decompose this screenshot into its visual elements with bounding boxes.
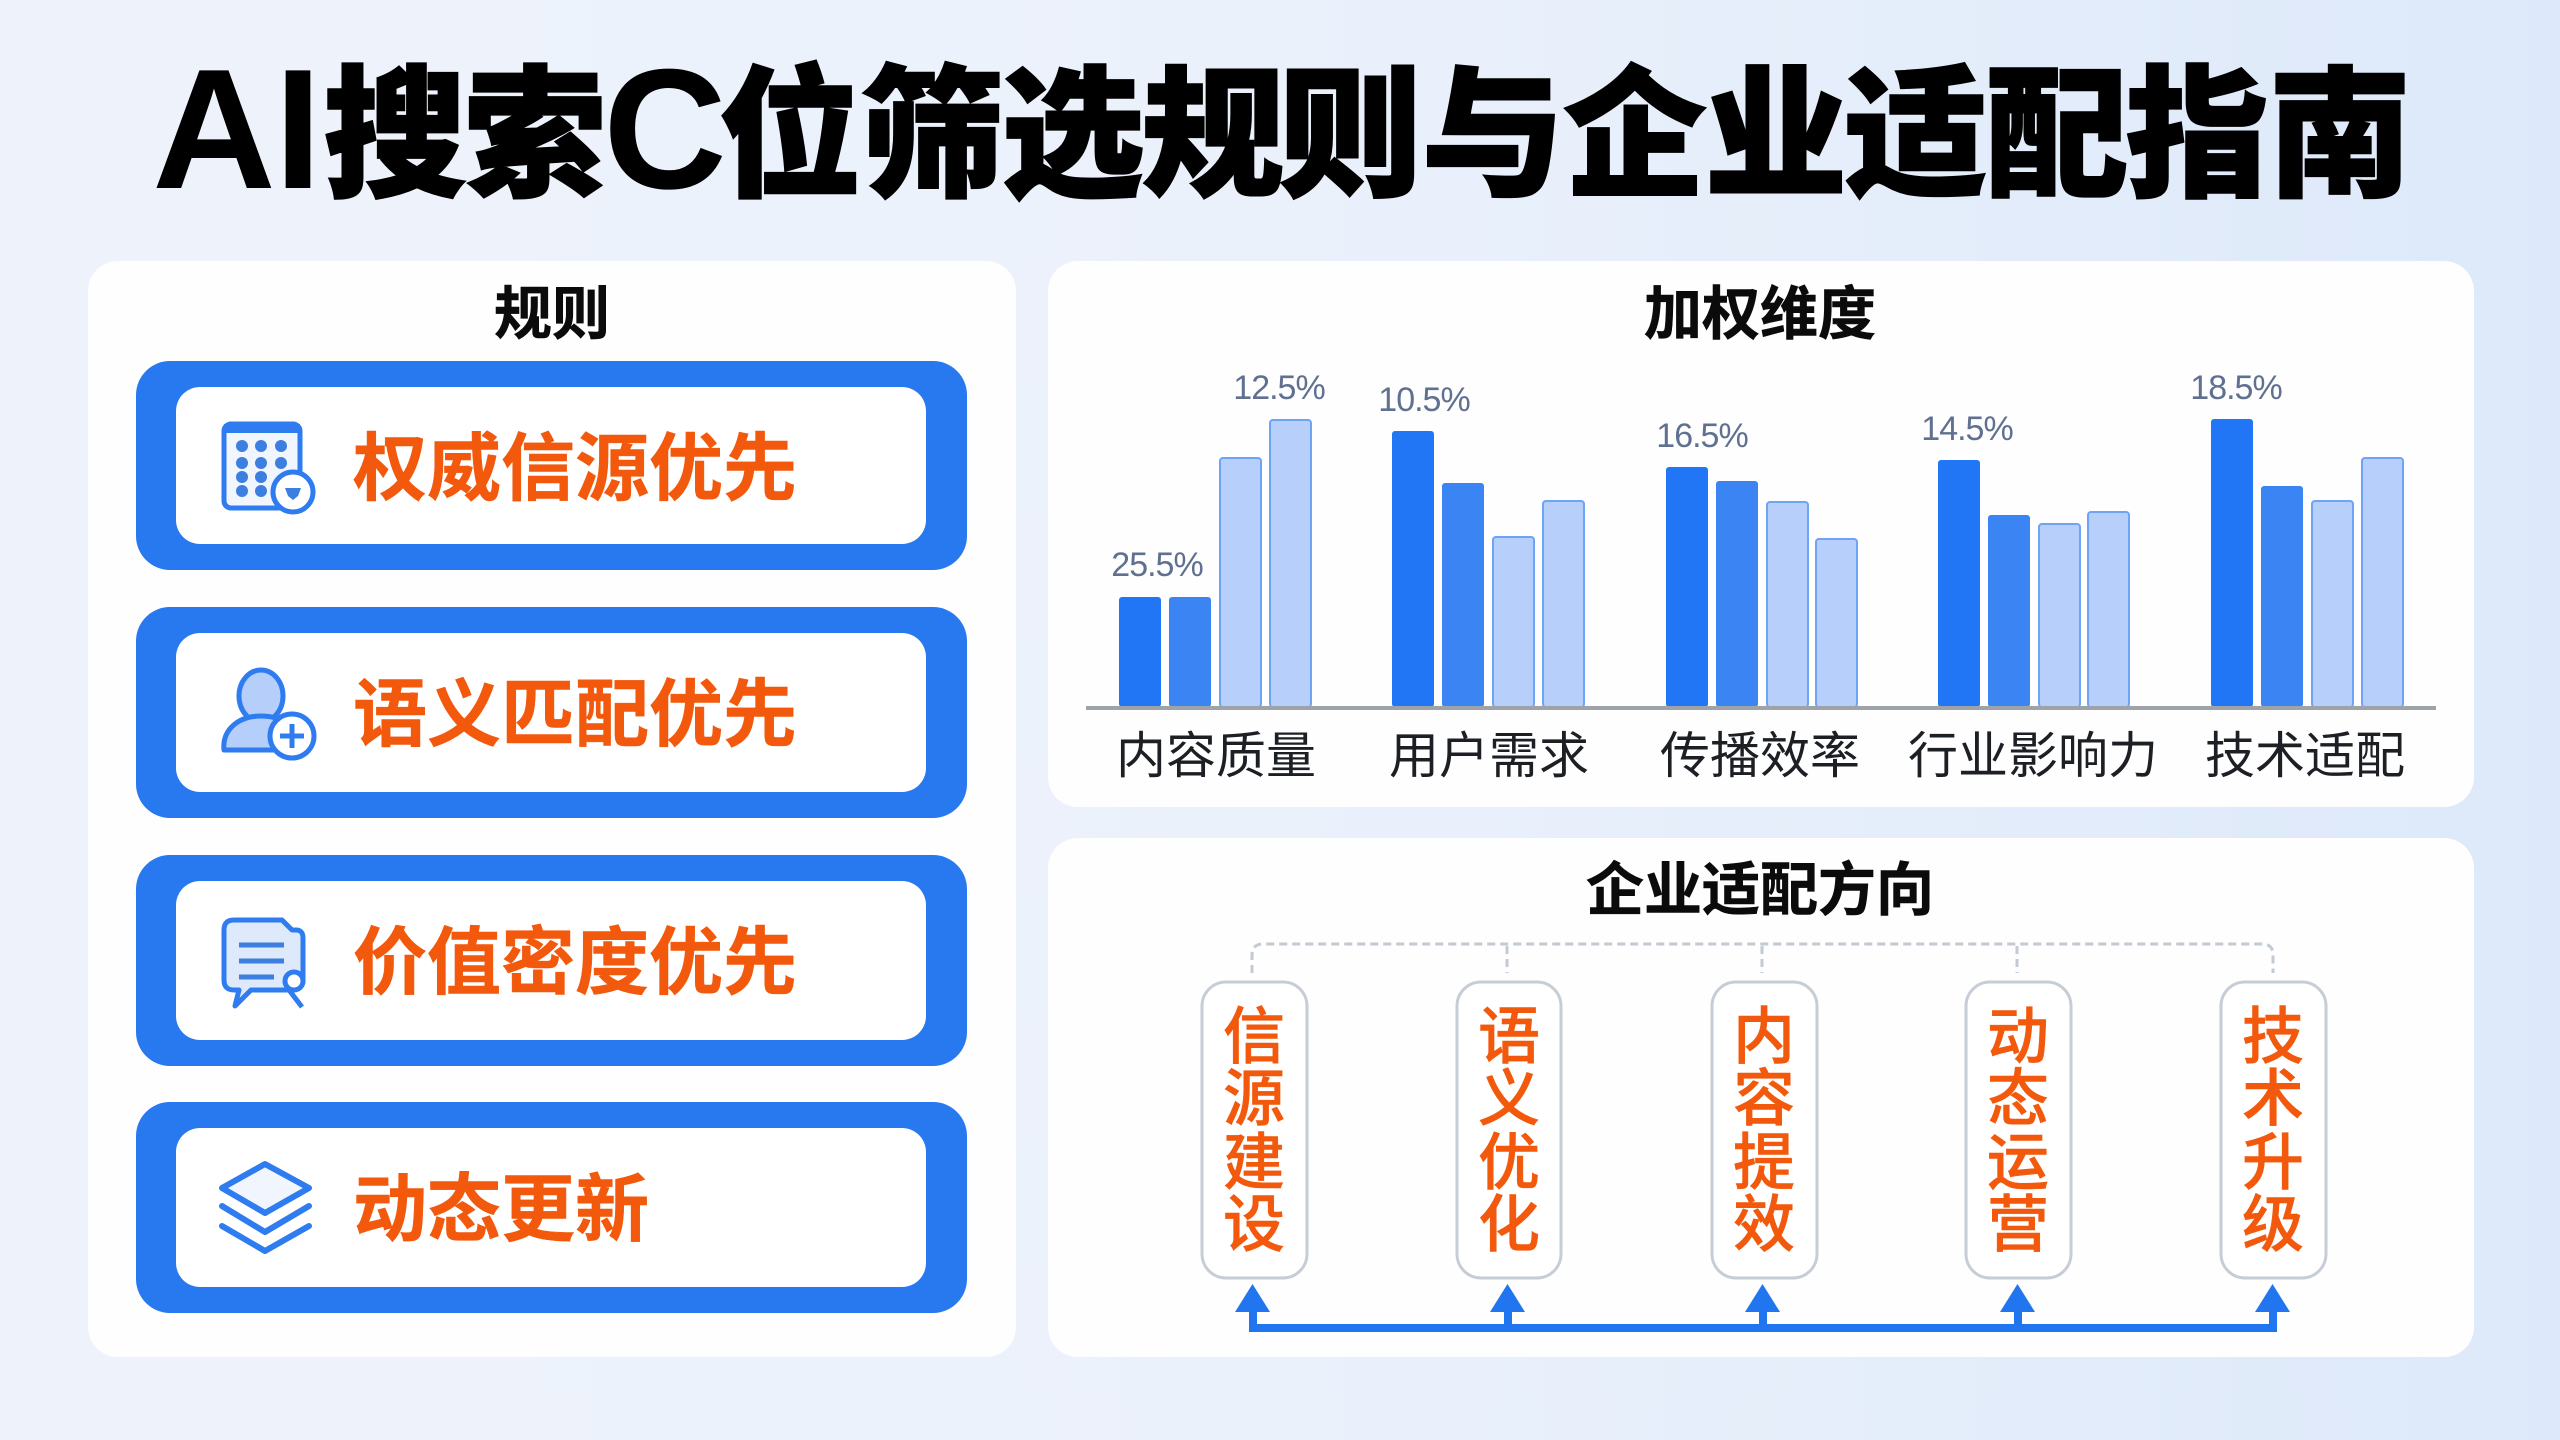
arrows: feedback line [1235, 1284, 2290, 1332]
direction: technology upgrade [2221, 982, 2326, 1278]
title: 位 [719, 57, 861, 216]
direction: technology upgrade: 术 [2242, 1065, 2304, 1134]
bar group: technical fit [2211, 419, 2403, 707]
direction: source building: 源 [1223, 1065, 1285, 1134]
title: 指 [2126, 57, 2268, 216]
direction: content efficiency: 提 [1733, 1129, 1795, 1198]
direction: semantic optimization [1457, 982, 1561, 1278]
label: semantic match: 语义匹配优先 [353, 673, 797, 756]
direction: semantic optimization: 优 [1478, 1129, 1540, 1198]
title: 适 [1845, 57, 1987, 216]
rule card: value density [136, 855, 967, 1066]
bar group: content quality [1119, 420, 1311, 707]
rule card: semantic match [136, 607, 967, 818]
value labels: 18.5% [2190, 369, 2282, 407]
bar group: distribution efficiency [1666, 467, 1857, 707]
icon: user plus [224, 670, 314, 758]
value labels: 16.5% [1656, 417, 1748, 455]
direction: semantic optimization: 语 [1478, 1003, 1540, 1072]
direction: technology upgrade: 级 [2242, 1191, 2304, 1260]
direction: content efficiency [1712, 982, 1817, 1278]
heading: weighted dimensions: 加权维度 [1644, 282, 1876, 347]
icon: layers [222, 1164, 309, 1251]
dashed bracket [1252, 944, 2273, 973]
title: 南 [2269, 57, 2411, 216]
bar group: user needs [1392, 431, 1584, 707]
direction: dynamic operations: 营 [1987, 1191, 2049, 1260]
direction: source building: 设 [1223, 1191, 1285, 1260]
direction: source building: 建 [1223, 1129, 1285, 1198]
title: 则 [1280, 57, 1422, 216]
direction: dynamic operations: 态 [1987, 1065, 2049, 1134]
direction: dynamic operations: 动 [1987, 1003, 2049, 1072]
bar chart [1086, 369, 2436, 784]
value labels: 10.5% [1378, 381, 1470, 419]
direction: semantic optimization: 义 [1478, 1065, 1540, 1134]
title: 企 [1564, 57, 1706, 216]
category labels: 传播效率 [1660, 728, 1860, 784]
direction: semantic optimization: 化 [1478, 1191, 1540, 1260]
rule card: authoritative sources [136, 361, 967, 570]
label: authoritative sources: 权威信源优先 [353, 427, 797, 510]
heading: rules: 规则 [494, 282, 610, 347]
value labels [1111, 369, 2282, 584]
direction: dynamic operations [1966, 982, 2071, 1278]
title: 规 [1142, 57, 1284, 216]
direction: source building [1202, 982, 1307, 1278]
bar group: industry influence [1938, 460, 2129, 707]
category labels: 行业影响力 [1908, 728, 2158, 784]
category labels: 用户需求 [1389, 728, 1589, 784]
icon: document bubble [224, 920, 303, 1007]
title: I [274, 34, 322, 225]
title [152, 34, 2411, 225]
heading: enterprise directions: 企业适配方向 [1586, 858, 1934, 923]
panel: weighted dimensions [1048, 261, 2474, 807]
direction: content efficiency: 内 [1733, 1003, 1795, 1072]
title: 索 [464, 57, 606, 216]
icon: calendar grid [224, 424, 313, 512]
label: value density: 价值密度优先 [353, 921, 797, 1004]
title: 筛 [862, 57, 1004, 216]
rule card: dynamic update [136, 1102, 967, 1313]
direction: source building: 信 [1223, 1003, 1285, 1072]
title: 配 [1986, 57, 2128, 216]
label: dynamic update: 动态更新 [353, 1168, 649, 1251]
value labels: 12.5% [1233, 369, 1325, 407]
value labels: 14.5% [1921, 410, 2013, 448]
title: C [603, 34, 727, 225]
title: 业 [1705, 57, 1847, 216]
title: A [152, 34, 276, 225]
direction: content efficiency: 容 [1733, 1065, 1795, 1134]
category labels: 技术适配 [2205, 728, 2405, 784]
direction: dynamic operations: 运 [1987, 1129, 2049, 1198]
panel: enterprise directions [1048, 838, 2474, 1357]
title: 与 [1422, 57, 1564, 216]
title: 搜 [324, 57, 466, 216]
panel: rules [88, 261, 1016, 1357]
category labels [1116, 728, 2405, 784]
value labels: 25.5% [1111, 546, 1203, 584]
direction: technology upgrade: 技 [2242, 1003, 2304, 1072]
category labels: 内容质量 [1116, 728, 1316, 784]
direction: technology upgrade: 升 [2242, 1129, 2304, 1198]
direction: content efficiency: 效 [1733, 1191, 1795, 1260]
chart axis [1086, 706, 2436, 710]
title: 选 [1002, 57, 1144, 216]
